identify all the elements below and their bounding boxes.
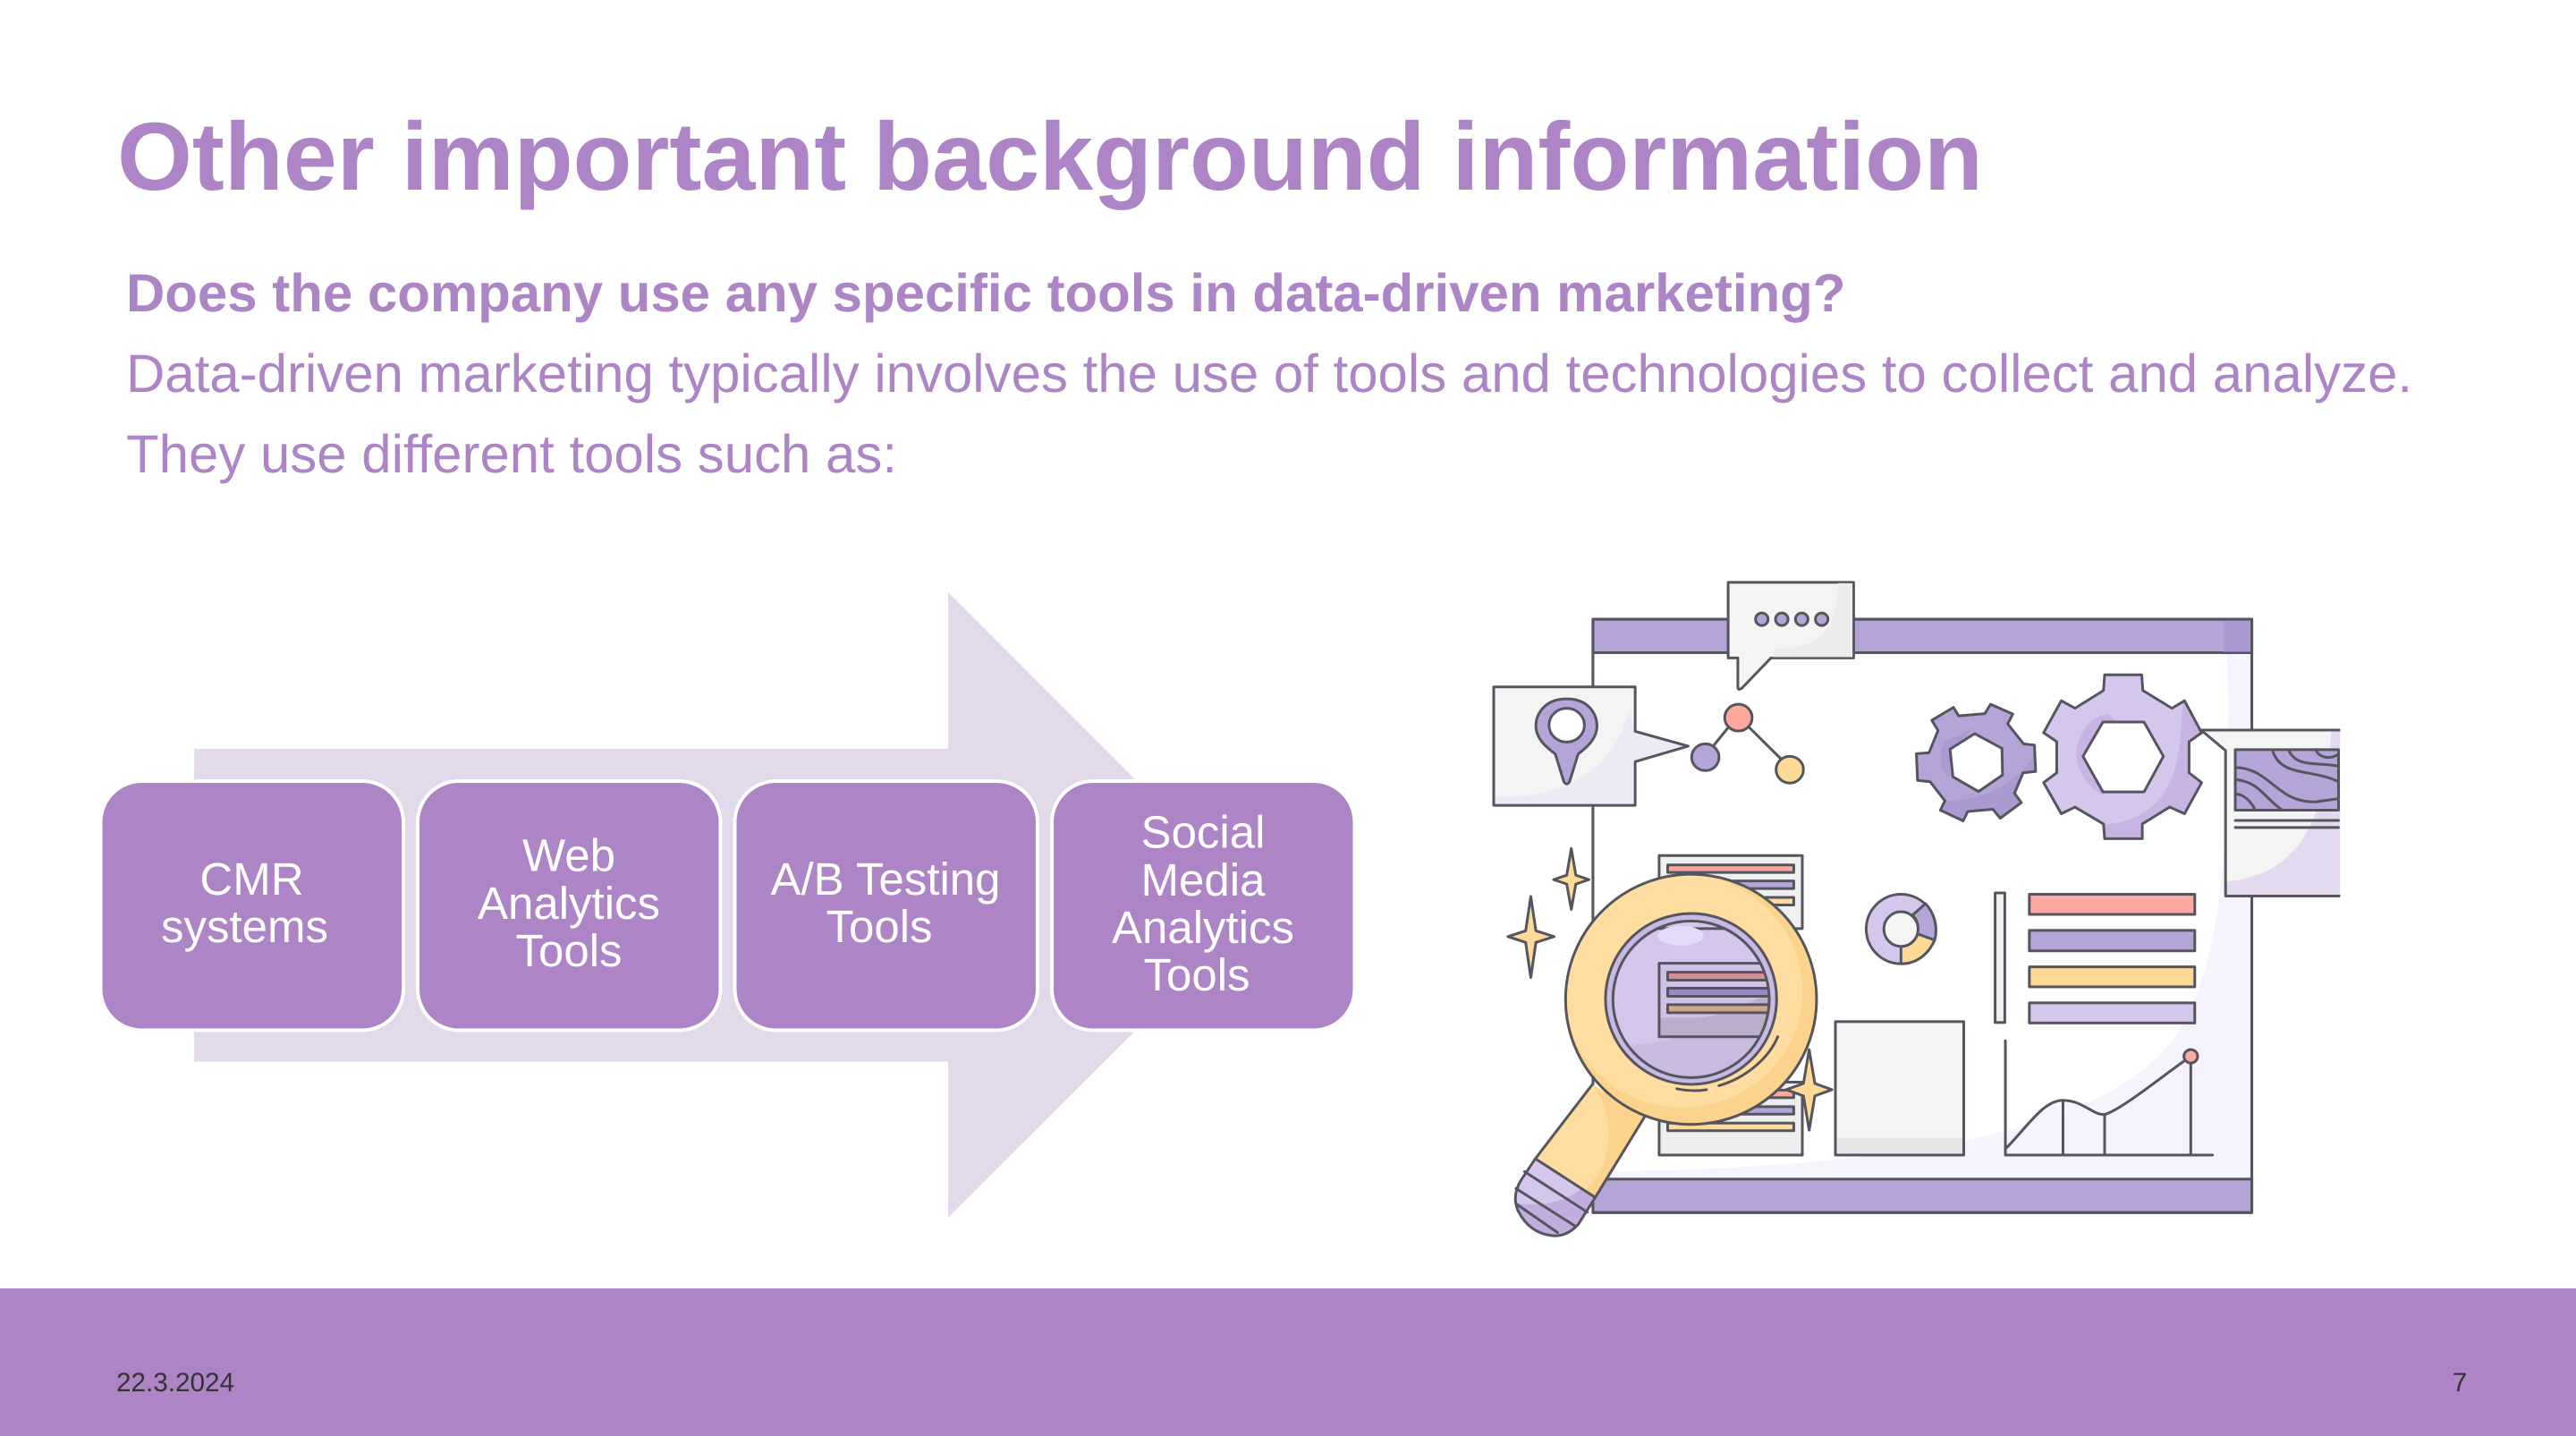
sparkle stars xyxy=(1508,848,1589,978)
document card: top xyxy=(1659,855,1802,929)
donut chart xyxy=(1866,895,1936,964)
box: Web Analytics Tools: Tools xyxy=(515,925,623,976)
text block: question and intro xyxy=(126,263,2412,484)
speech bubble with dots xyxy=(1728,582,1853,690)
box: CMR systems: CMR xyxy=(199,854,304,905)
box: A/B Testing Tools: Tools xyxy=(826,901,933,952)
lens xyxy=(1614,922,1758,1045)
ring xyxy=(1565,874,1817,1125)
magnifying glass xyxy=(1513,874,1817,1240)
box: Web Analytics Tools xyxy=(418,781,721,1031)
illustration: data analysis dashboard xyxy=(1494,582,2340,1240)
footer date: 22.3.2024 xyxy=(116,1368,234,1398)
document card: bottom xyxy=(1659,1082,1802,1155)
title: Other important background information xyxy=(117,102,1983,210)
box: Social Media Analytics Tools: Analytics xyxy=(1112,902,1294,953)
box: Social Media Analytics Tools: Social xyxy=(1141,807,1265,857)
icon: small gear xyxy=(1917,704,2038,821)
dashboard window xyxy=(1593,619,2252,1212)
sparkle star: lower right xyxy=(1786,1049,1832,1130)
box: Social Media Analytics Tools: Media xyxy=(1141,854,1266,905)
icon: large gear xyxy=(2044,675,2208,844)
line chart xyxy=(2005,1041,2213,1155)
box: A/B Testing Tools: A/B Testing xyxy=(770,854,1001,905)
network nodes xyxy=(1691,704,1803,783)
right side card with map xyxy=(2201,730,2340,896)
horizontal bar list with scale xyxy=(1996,893,2195,1023)
box: CMR systems: systems xyxy=(161,901,328,952)
box: A/B Testing Tools xyxy=(735,781,1038,1031)
process diagram: arrow with four tool boxes xyxy=(100,592,1354,1218)
background arrow xyxy=(194,592,1261,1218)
location pin bubble xyxy=(1494,687,1688,805)
icon: pin xyxy=(1536,699,1597,784)
box: Social Media Analytics Tools xyxy=(1052,781,1354,1031)
box: CMR systems xyxy=(100,781,403,1031)
box: Web Analytics Tools: Analytics xyxy=(478,878,660,929)
page number: 7 xyxy=(2453,1368,2467,1398)
box: Web Analytics Tools: Web xyxy=(522,830,615,880)
grip xyxy=(1517,1160,1580,1204)
handle xyxy=(1537,1084,1608,1190)
intro line 2: They use different tools such as: xyxy=(126,424,897,484)
empty grey card xyxy=(1835,1022,1963,1155)
box: Social Media Analytics Tools: Tools xyxy=(1143,949,1250,1000)
intro line 1: Data-driven marketing typically involves the use of tools and technologies to collect and analyze. xyxy=(126,344,2412,404)
map thumbnail xyxy=(2235,750,2338,811)
question heading: Does the company use any specific tools in data-driven marketing? xyxy=(126,263,1845,323)
footer band xyxy=(0,1288,2576,1436)
